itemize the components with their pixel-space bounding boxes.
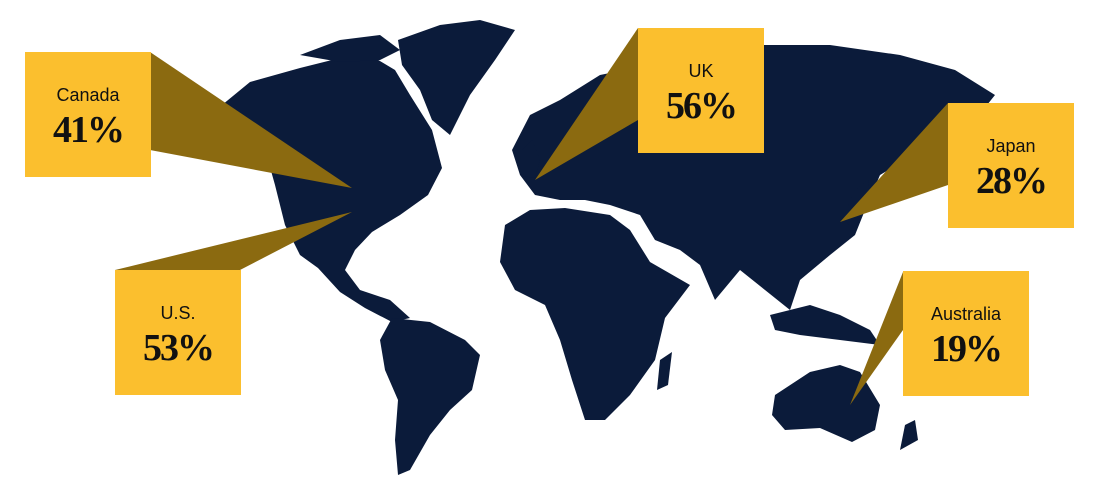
box: us: 53% bbox=[143, 327, 213, 369]
greenland bbox=[398, 20, 515, 135]
box: japan: 28% bbox=[976, 160, 1046, 202]
callout: japan bbox=[840, 103, 948, 222]
box: australia bbox=[903, 271, 1029, 396]
box: japan bbox=[948, 103, 1074, 228]
box: uk: UK bbox=[688, 61, 714, 81]
arctic islands bbox=[300, 35, 400, 62]
eurasia bbox=[512, 45, 995, 310]
box: australia: Australia bbox=[931, 304, 1001, 324]
callout: us bbox=[115, 212, 352, 270]
box: canada: Canada bbox=[56, 85, 120, 105]
box: uk: 56% bbox=[666, 85, 736, 127]
box: canada: 41% bbox=[53, 109, 123, 151]
callout: canada bbox=[150, 52, 352, 188]
new zealand bbox=[900, 420, 918, 450]
uk bbox=[522, 140, 540, 178]
australia bbox=[772, 365, 880, 442]
callout: australia bbox=[850, 272, 903, 405]
box: australia: 19% bbox=[931, 328, 1001, 370]
south america bbox=[380, 318, 480, 475]
callout: uk bbox=[535, 28, 638, 180]
north america bbox=[222, 55, 442, 322]
box: japan: Japan bbox=[986, 136, 1036, 156]
box: canada bbox=[25, 52, 151, 177]
box: us: U.S. bbox=[160, 303, 196, 323]
se asia islands bbox=[770, 305, 880, 345]
box: uk bbox=[638, 28, 764, 153]
box: us bbox=[115, 270, 241, 395]
madagascar bbox=[657, 352, 672, 390]
africa bbox=[500, 208, 690, 420]
japan bbox=[842, 180, 872, 225]
